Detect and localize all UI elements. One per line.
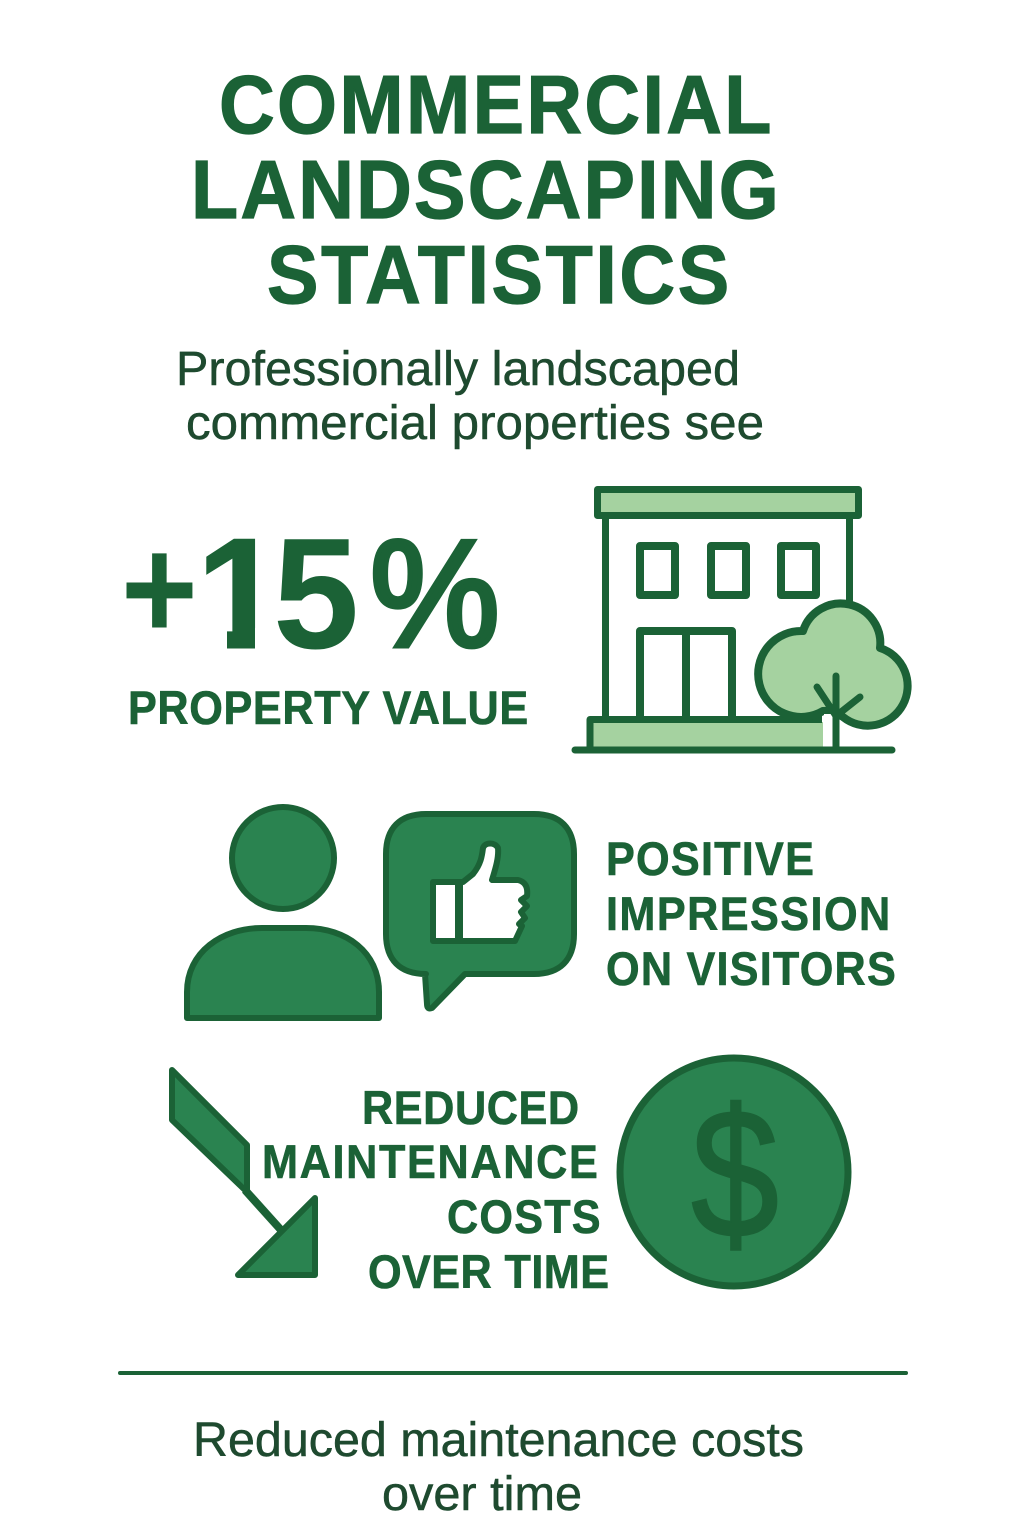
title: COMMERCIAL: [219, 57, 771, 151]
label: reduced maintenance: COSTS: [447, 1190, 601, 1243]
subtitle: Professionally landscaped: [176, 343, 740, 396]
icon: building with tree: [575, 490, 908, 750]
footer text: [193, 1414, 804, 1521]
stat: +15%: 1: [196, 506, 284, 682]
stat: +15%: [121, 506, 500, 682]
label: reduced maintenance: REDUCED: [362, 1081, 579, 1134]
icon: down arrow: [172, 1070, 315, 1275]
label: positive impression: POSITIVE: [606, 832, 814, 885]
subtitle: commercial properties see: [186, 397, 764, 450]
label: positive impression: [606, 832, 896, 995]
stat: +15%: +: [121, 508, 198, 671]
subtitle: [176, 343, 764, 450]
footer divider: [118, 1371, 908, 1375]
icon: person: [187, 807, 379, 1018]
label: reduced maintenance: OVER TIME: [368, 1245, 609, 1298]
title: LANDSCAPING: [191, 142, 779, 236]
title: STATISTICS: [267, 227, 729, 321]
label: positive impression: IMPRESSION: [606, 887, 890, 940]
footer text: Reduced maintenance costs: [193, 1414, 804, 1467]
label: reduced maintenance: MAINTENANCE: [262, 1135, 598, 1188]
label: positive impression: ON VISITORS: [606, 942, 896, 995]
stat: +15%: %: [370, 508, 500, 679]
icon: thumbs up speech bubble: [386, 814, 574, 1008]
label: property value: PROPERTY VALUE: [128, 681, 528, 734]
stat: +15%: 5: [273, 506, 359, 682]
footer text: over time: [382, 1468, 582, 1521]
label: reduced maintenance: [262, 1081, 609, 1298]
icon: dollar coin: [620, 1058, 848, 1286]
icon: dollar coin: $: [691, 1072, 779, 1277]
title: [191, 57, 779, 321]
